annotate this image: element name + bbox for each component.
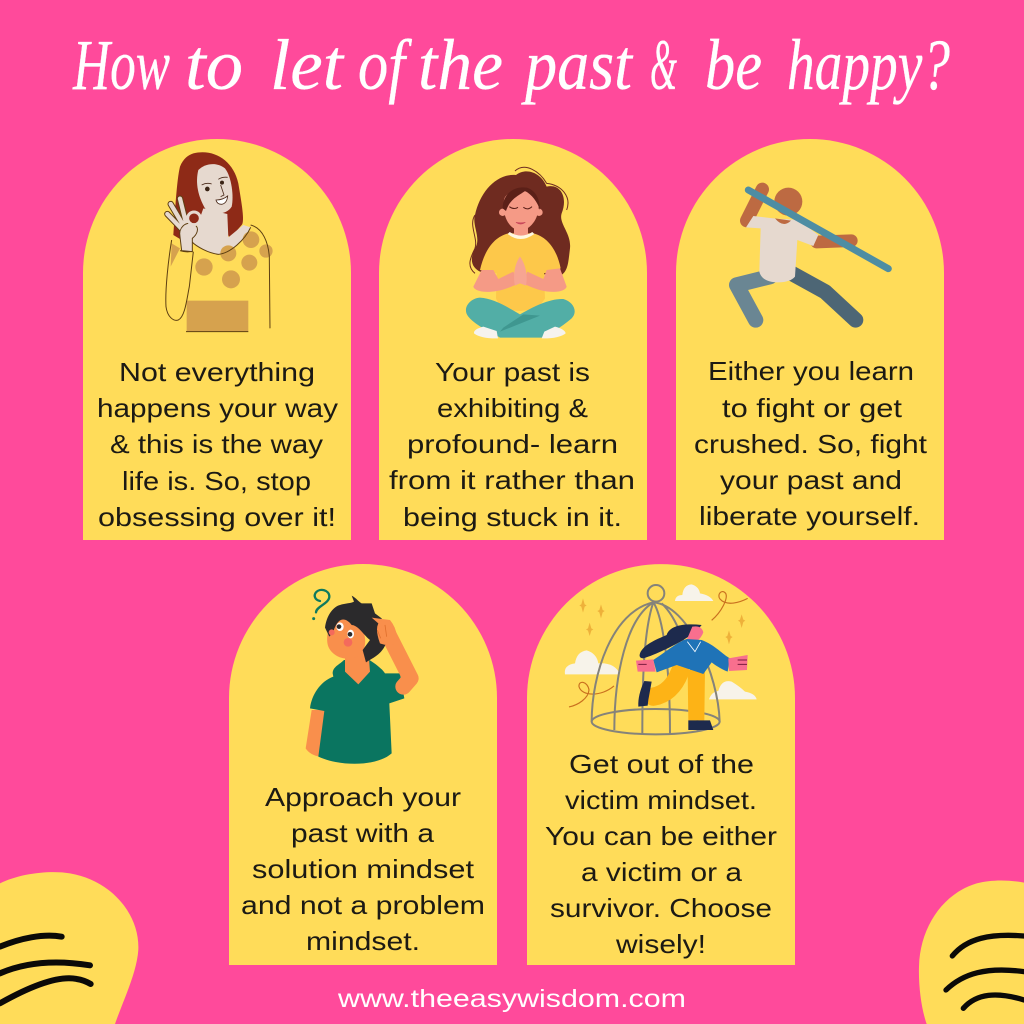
title: past (521, 25, 634, 105)
text block 2: profound- learn (407, 429, 618, 459)
text block 3: to fight or get (722, 393, 903, 423)
text block 4: mindset. (306, 926, 420, 956)
footer website url: www.theeasywisdom.com (337, 985, 686, 1013)
title (72, 25, 950, 105)
decorative blob bottom left (0, 872, 138, 1024)
text block 5: You can be either (545, 821, 777, 851)
title: let (270, 25, 345, 105)
arch card 1 (83, 139, 351, 540)
text block 3 (694, 356, 928, 531)
panel: not everything happens your way (83, 139, 351, 540)
text block 1: obsessing over it! (98, 502, 336, 532)
text block 4: past with a (291, 818, 435, 848)
text block 5 (545, 749, 777, 959)
title: to (185, 25, 243, 105)
text block 2: being stuck in it. (403, 502, 622, 532)
title: How (72, 25, 170, 105)
text block 4: Approach your (265, 782, 461, 812)
text block 1: & this is the way (110, 429, 323, 459)
text block 2: Your past is (435, 357, 590, 387)
text block 5: victim mindset. (565, 785, 757, 815)
text block 3: your past and (720, 465, 902, 495)
icon: thinking boy with question mark (306, 590, 411, 764)
text block 3: Either you learn (708, 356, 914, 386)
text block 5: wisely! (615, 929, 706, 959)
title: & (650, 25, 677, 105)
panel: get out of the victim mindset (527, 564, 795, 965)
text block 1: life is. So, stop (122, 466, 311, 496)
arch card 5 (527, 564, 795, 965)
text block 1 (97, 357, 338, 532)
title: be (705, 25, 762, 105)
text block 5: Get out of the (569, 749, 754, 779)
arch card 3 (676, 139, 944, 540)
text block 2: exhibiting & (437, 393, 588, 423)
title: of (358, 25, 413, 105)
text block 4: solution mindset (252, 854, 475, 884)
text block 4: and not a problem (241, 890, 485, 920)
icon: woman stepping out of cage (565, 584, 757, 734)
title: the (418, 25, 503, 105)
text block 5: survivor. Choose (550, 893, 772, 923)
decorative blob bottom right (919, 880, 1024, 1024)
panel: solution mindset (229, 564, 497, 965)
icon: woman making ok gesture (166, 152, 273, 332)
text block 1: happens your way (97, 393, 338, 423)
title: happy? (787, 25, 950, 105)
text block 2: from it rather than (389, 465, 635, 495)
icon: meditating woman (466, 167, 575, 338)
arch card 4 (229, 564, 497, 965)
arch card 2 (379, 139, 647, 540)
text block 3: liberate yourself. (699, 501, 920, 531)
text block 4 (241, 782, 485, 956)
text block 1: Not everything (119, 357, 315, 387)
text block 2 (389, 357, 635, 532)
text block 5: a victim or a (581, 857, 743, 887)
panel: your past is exhibiting (379, 139, 647, 540)
text block 3: crushed. So, fight (694, 429, 928, 459)
icon: figure with staff (737, 188, 888, 320)
panel: either you learn to fight (676, 139, 944, 540)
